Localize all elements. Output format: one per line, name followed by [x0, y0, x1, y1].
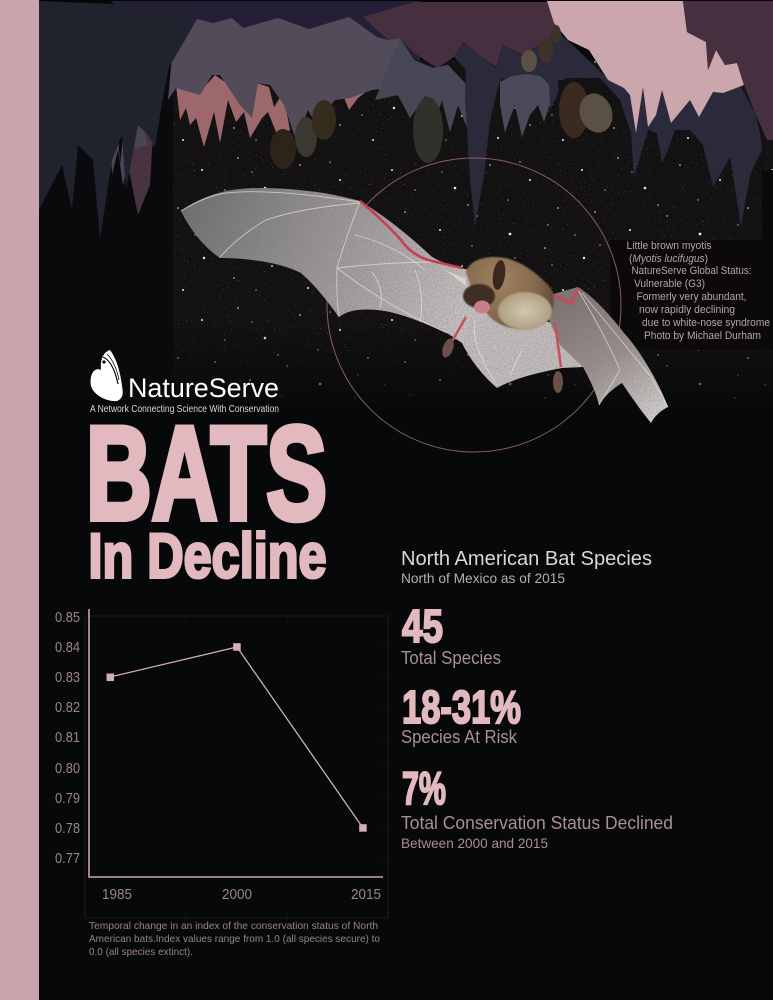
y axis labels: 0.80: [55, 761, 80, 777]
title: In Decline: In Decline: [88, 522, 326, 592]
bat photograph illustration: [181, 188, 668, 423]
red forearm: [360, 201, 462, 268]
title: BATS: BATS: [86, 400, 327, 548]
y axis labels: 0.82: [55, 700, 80, 716]
chart note: Temporal change in an index of the conservation status of North: [89, 920, 378, 932]
right forearm: [545, 288, 578, 303]
stat sublabel: years: Between 2000 and 2015: [401, 835, 548, 851]
face: [463, 284, 495, 308]
chart note: [89, 920, 380, 958]
y axis labels: 0.81: [55, 730, 80, 746]
black gap: [558, 80, 612, 135]
feet: [440, 337, 563, 393]
y axis labels: 0.79: [55, 791, 80, 807]
y axis labels: 0.84: [55, 640, 80, 656]
grey left stalactites: [110, 110, 148, 186]
data markers: [106, 643, 367, 832]
grey cave mass: [168, 17, 468, 140]
purple ceiling strip: [110, 1, 420, 60]
pink cave mass: [547, 1, 744, 133]
circle outline behind bat: [327, 158, 621, 452]
chart note: 0.0 (all species extinct).: [89, 946, 193, 958]
bat species caption: Vulnerable (G3): [634, 278, 705, 290]
maroon ceiling: [363, 2, 559, 68]
navy left wall: [39, 1, 194, 240]
logo tagline: A Network Connecting Science With Conservation: [90, 404, 279, 415]
navy central and right stalactites: [454, 33, 762, 227]
bat species caption: NatureServe Global Status:: [632, 265, 752, 277]
tragus: [445, 270, 466, 286]
logo: NatureServe: [90, 350, 279, 415]
mouth: [474, 300, 490, 314]
left lower cave wall: [39, 60, 173, 400]
line chart: [55, 609, 388, 918]
cave ceiling: [39, 0, 773, 400]
stats subheading: North of Mexico as of 2015: [401, 570, 565, 586]
mauve left stalactites: [122, 100, 160, 215]
left pink band: [0, 0, 39, 1000]
icon: butterfly: [91, 350, 123, 401]
bat species caption: [626, 240, 770, 342]
bat species caption: now rapidly declining: [639, 304, 735, 316]
y axis labels: 0.77: [55, 851, 80, 867]
stat: 18-31%: 18-31%: [402, 681, 521, 733]
x axis labels: 2015: [351, 887, 381, 903]
starfield sky: [165, 60, 773, 402]
y axis labels: [55, 610, 80, 867]
blue grey overlay stalactites: [375, 38, 468, 132]
hanging roost bats: [270, 25, 618, 169]
wing veins: [181, 192, 668, 407]
chart note: American bats.Index values range from 1.0 (all species secure) to: [89, 933, 380, 945]
x axis labels: [102, 887, 381, 903]
stat label: total species: Total Species: [401, 648, 501, 668]
bat species caption: (Myotis lucifugus): [629, 253, 708, 265]
salmon stalactites left: [176, 75, 290, 147]
bat species caption: Photo by Michael Durham: [644, 330, 761, 342]
stats heading: North American Bat Species: [401, 548, 652, 570]
bat species caption: Formerly very abundant,: [636, 291, 746, 303]
stat label: conservation status: Total Conservation Status Declined: [401, 813, 673, 833]
legs: [451, 317, 561, 367]
stat: 45: 45: [402, 600, 443, 652]
belly: [498, 292, 552, 330]
stats panel: [401, 548, 673, 851]
stat label: species at risk: Species At Risk: [401, 727, 518, 747]
tail membrane: [462, 315, 583, 388]
grey central drip: [500, 74, 550, 137]
data line: [110, 647, 363, 828]
x axis labels: 1985: [102, 887, 132, 903]
y axis labels: 0.78: [55, 821, 80, 837]
bat species caption: Little brown myotis: [626, 240, 712, 252]
ear: [491, 259, 507, 291]
y axis labels: 0.85: [55, 610, 80, 626]
salmon stalactites right: [312, 78, 372, 118]
caption backing panel: [610, 240, 773, 350]
right maroon wall: [683, 1, 773, 140]
chart axes: [89, 609, 383, 877]
logo wordmark: NatureServe: [128, 373, 279, 403]
right wing membrane: [545, 287, 668, 423]
body fur: [466, 257, 554, 329]
right edge dark strip: [762, 170, 773, 240]
y axis labels: 0.83: [55, 670, 80, 686]
left wing membrane: [181, 188, 500, 343]
x axis labels: 2000: [222, 887, 252, 903]
stat: 7%: 7%: [402, 762, 446, 814]
